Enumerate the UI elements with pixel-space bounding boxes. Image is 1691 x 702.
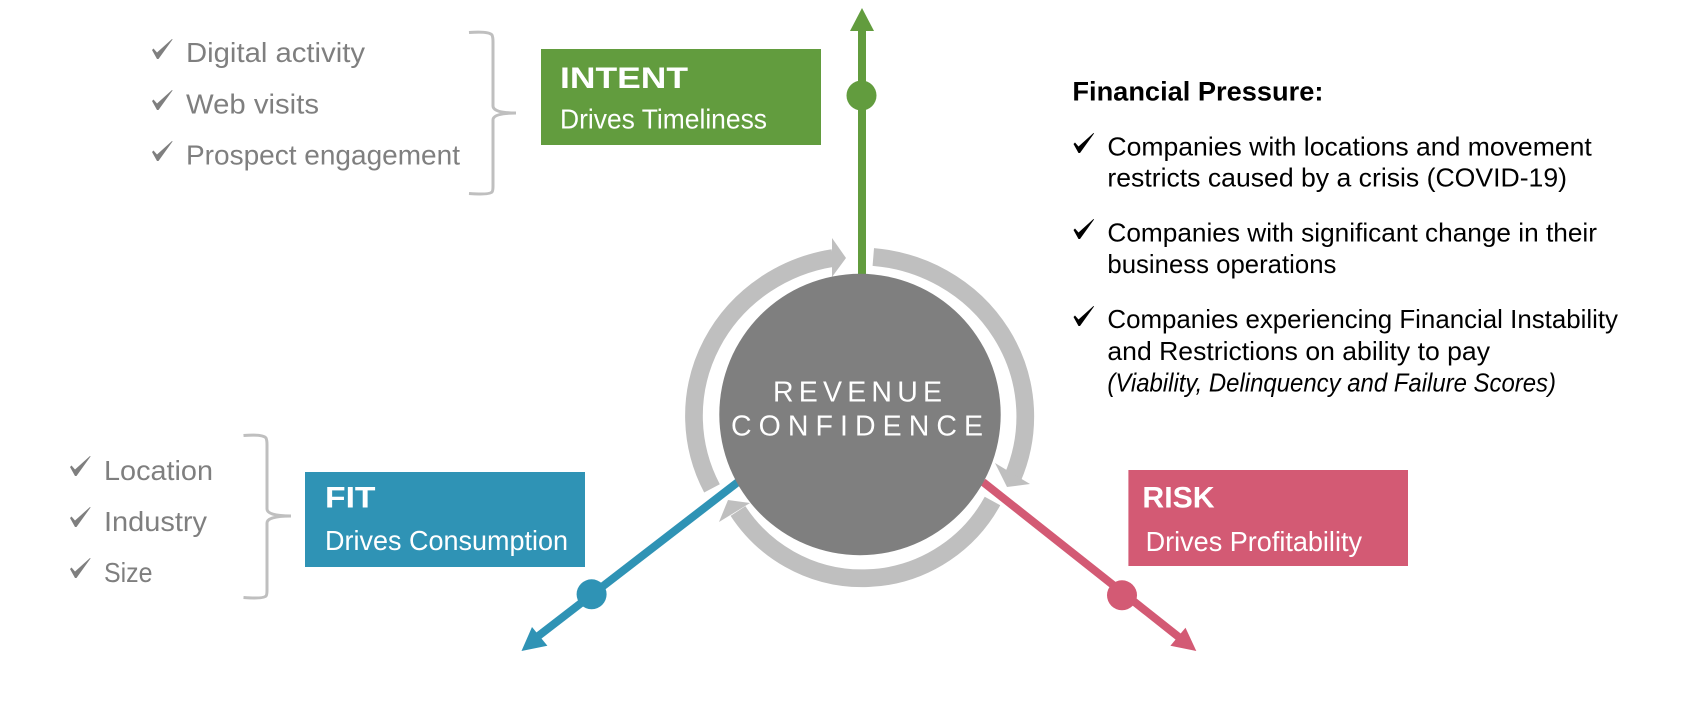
arrow: risk axis <box>983 482 1196 651</box>
list: intent signals: Digital activity <box>186 37 365 68</box>
bullet: crisis restrictions: Companies with locations and movement <box>1107 132 1593 162</box>
bullet: business operations: Companies with significant change in their <box>1107 218 1597 248</box>
list: fit signals: Location <box>104 455 213 486</box>
bullet: financial instability: Companies experiencing Financial Instability <box>1107 304 1618 334</box>
list: fit signals <box>70 455 213 588</box>
bullet: crisis restrictions <box>1074 132 1593 193</box>
bullet: financial instability <box>1074 304 1618 398</box>
panel: risk box: RISK <box>1142 482 1215 515</box>
cycle arrow: bottom arc <box>719 500 992 578</box>
panel: fit box <box>305 472 585 567</box>
cycle arrow: right arc <box>873 257 1030 487</box>
bullet: business operations: business operations <box>1107 249 1336 279</box>
cycle arrow: left arc <box>694 238 846 488</box>
brace: fit list <box>244 435 291 598</box>
diagram: revenue confidence hub <box>522 8 1196 651</box>
bullet: business operations <box>1074 218 1597 279</box>
arrow: fit axis <box>522 482 738 651</box>
bullet: financial instability: and Restrictions on ability to pay <box>1107 336 1490 366</box>
list: fit signals: Industry <box>104 506 207 537</box>
center circle: revenue confidence <box>719 274 1001 555</box>
panel: intent box <box>541 49 821 145</box>
list: fit signals: Size <box>104 557 152 588</box>
panel: intent box: Drives Timeliness <box>560 103 767 134</box>
panel: fit box: FIT <box>325 482 376 515</box>
heading: financial pressure: Financial Pressure: <box>1072 77 1323 107</box>
panel: intent box: INTENT <box>560 62 688 95</box>
center circle: revenue confidence: REVENUE <box>773 377 942 409</box>
bullet: crisis restrictions: restricts caused by a crisis (COVID-19) <box>1107 163 1567 193</box>
list: intent signals <box>152 37 460 170</box>
center circle: revenue confidence: CONFIDENCE <box>731 411 983 443</box>
text block: financial pressure <box>1072 77 1618 398</box>
list: intent signals: Prospect engagement <box>186 139 460 170</box>
panel: risk box <box>1128 470 1408 566</box>
arrow: intent axis <box>846 8 876 276</box>
brace: intent list <box>469 32 516 194</box>
panel: risk box: Drives Profitability <box>1146 526 1362 557</box>
bullet: financial instability: (Viability, Delinquency and Failure Scores) <box>1107 368 1556 398</box>
panel: fit box: Drives Consumption <box>325 525 568 556</box>
list: intent signals: Web visits <box>186 88 319 119</box>
